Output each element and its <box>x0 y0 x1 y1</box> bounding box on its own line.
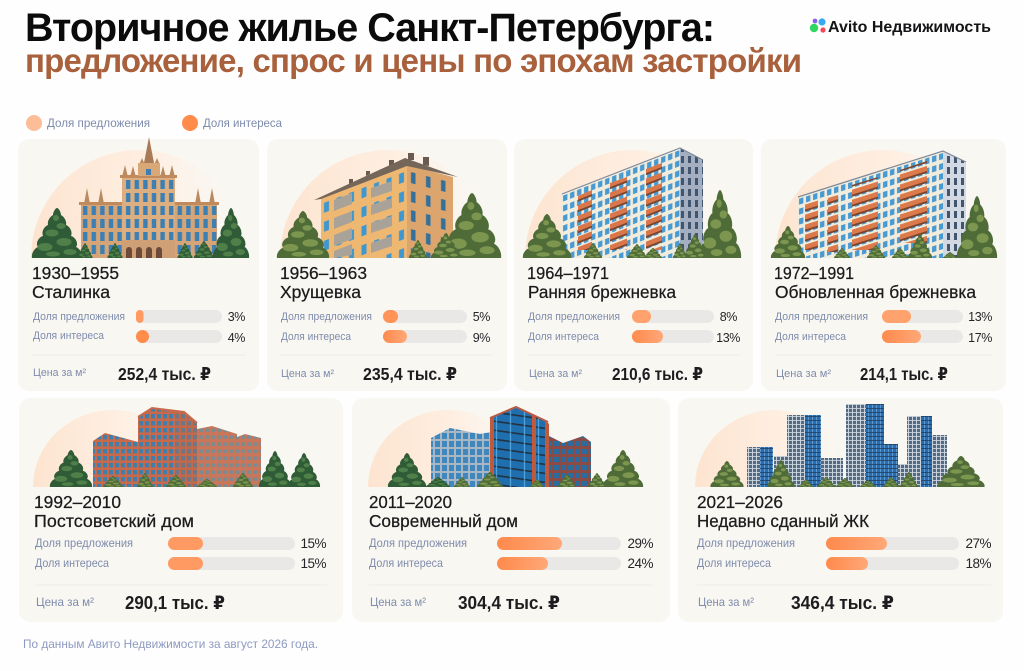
period: 2011–2020 <box>369 492 452 512</box>
supply row <box>33 310 245 324</box>
supply row: Доля предложения <box>281 311 372 323</box>
price: 214,1 тыс. ₽ <box>860 364 948 384</box>
panel: Недавно сданный ЖК <box>678 398 1003 622</box>
supply row <box>528 310 737 324</box>
interest row <box>528 330 740 345</box>
interest row: 4% <box>228 331 245 345</box>
legend: Доля интереса <box>203 116 282 130</box>
illustration: современный дом <box>368 407 643 487</box>
supply row: 15% <box>300 536 326 551</box>
panel: Постсоветский дом <box>19 398 343 622</box>
price: 210,6 тыс. ₽ <box>612 364 703 384</box>
price <box>33 364 211 384</box>
subtitle: предложение, спрос и цены по эпохам застройки <box>25 42 802 79</box>
price <box>36 592 225 613</box>
interest row: Доля интереса <box>33 330 105 342</box>
panel: Современный дом <box>352 398 670 622</box>
supply row: Доля предложения <box>775 311 868 323</box>
era name: Сталинка <box>32 282 110 302</box>
price <box>529 364 703 384</box>
supply row <box>775 310 992 324</box>
illustration: обновленная брежневка <box>771 150 997 258</box>
supply row: 29% <box>627 536 653 551</box>
legend: Доля предложения <box>47 116 150 130</box>
supply row: Доля предложения <box>33 311 125 323</box>
price: Цена за м² <box>370 595 426 609</box>
period: 1992–2010 <box>34 492 121 512</box>
price: Цена за м² <box>36 595 94 609</box>
supply row <box>369 536 653 551</box>
price: 290,1 тыс. ₽ <box>125 592 225 613</box>
era name: Постсоветский дом <box>34 511 194 531</box>
supply row <box>697 536 991 551</box>
supply row: 3% <box>228 310 245 324</box>
supply row: 8% <box>720 310 737 324</box>
period: 1972–1991 <box>774 263 854 283</box>
panel: Хрущевка <box>267 139 507 391</box>
interest row <box>35 556 326 571</box>
interest row: Доля интереса <box>369 556 443 570</box>
era name: Современный дом <box>369 511 518 531</box>
illustration: недавно сданный ЖК <box>695 404 985 487</box>
panel: Ранняя брежневка <box>514 139 753 391</box>
period: 1964–1971 <box>527 263 609 283</box>
price: Цена за м² <box>776 368 831 380</box>
interest row <box>697 556 991 571</box>
interest row: Доля интереса <box>281 331 352 343</box>
illustration: сталинка <box>31 137 249 258</box>
price: Цена за м² <box>281 368 334 380</box>
interest row: Доля интереса <box>697 556 771 570</box>
price <box>776 364 948 384</box>
supply row: 27% <box>965 536 991 551</box>
source note: По данным Авито Недвижимости за август 2026 года. <box>23 637 318 651</box>
interest row <box>33 330 245 345</box>
supply row <box>35 536 326 551</box>
illustration: постсоветский дом <box>33 408 320 487</box>
interest row: Доля интереса <box>35 556 109 570</box>
interest row: 13% <box>716 331 740 345</box>
era name: Ранняя брежневка <box>528 282 676 302</box>
supply row: Доля предложения <box>697 536 795 550</box>
price: Цена за м² <box>698 595 754 609</box>
interest row: 17% <box>968 331 992 345</box>
interest row: Доля интереса <box>528 331 600 343</box>
interest row <box>775 330 992 345</box>
supply row: 13% <box>968 310 992 324</box>
interest row <box>281 330 490 345</box>
interest row: 15% <box>300 556 326 571</box>
panel: Сталинка <box>18 137 259 391</box>
period: 1956–1963 <box>280 263 367 283</box>
supply row: Доля предложения <box>369 536 467 550</box>
illustration: ранняя брежневка <box>523 148 741 258</box>
era name: Хрущевка <box>280 282 361 302</box>
supply row: 5% <box>473 310 490 324</box>
supply row <box>281 310 490 324</box>
price: 252,4 тыс. ₽ <box>118 364 211 384</box>
title: Вторичное жилье Санкт-Петербурга: <box>25 6 715 50</box>
illustration: хрущевка <box>277 150 501 258</box>
era name: Обновленная брежневка <box>775 282 976 302</box>
price <box>281 364 457 384</box>
price: 235,4 тыс. ₽ <box>363 364 457 384</box>
period: 2021–2026 <box>697 492 783 512</box>
price: Цена за м² <box>529 368 582 380</box>
price <box>370 592 560 613</box>
panel: Обновленная брежневка <box>761 139 1006 391</box>
supply row: Доля предложения <box>35 536 133 550</box>
era name: Недавно сданный ЖК <box>697 511 870 531</box>
period: 1930–1955 <box>32 263 119 283</box>
price <box>698 592 894 613</box>
interest row: 18% <box>965 556 991 571</box>
interest row: 24% <box>627 556 653 571</box>
price: 346,4 тыс. ₽ <box>791 592 894 613</box>
legend <box>26 115 282 131</box>
interest row: 9% <box>473 331 490 345</box>
interest row <box>369 556 653 571</box>
supply row: Доля предложения <box>528 311 620 323</box>
interest row: Доля интереса <box>775 331 847 343</box>
logo: Avito Недвижимость: Avito Недвижимость <box>828 19 991 36</box>
price: Цена за м² <box>33 367 86 379</box>
price: 304,4 тыс. ₽ <box>458 592 560 613</box>
